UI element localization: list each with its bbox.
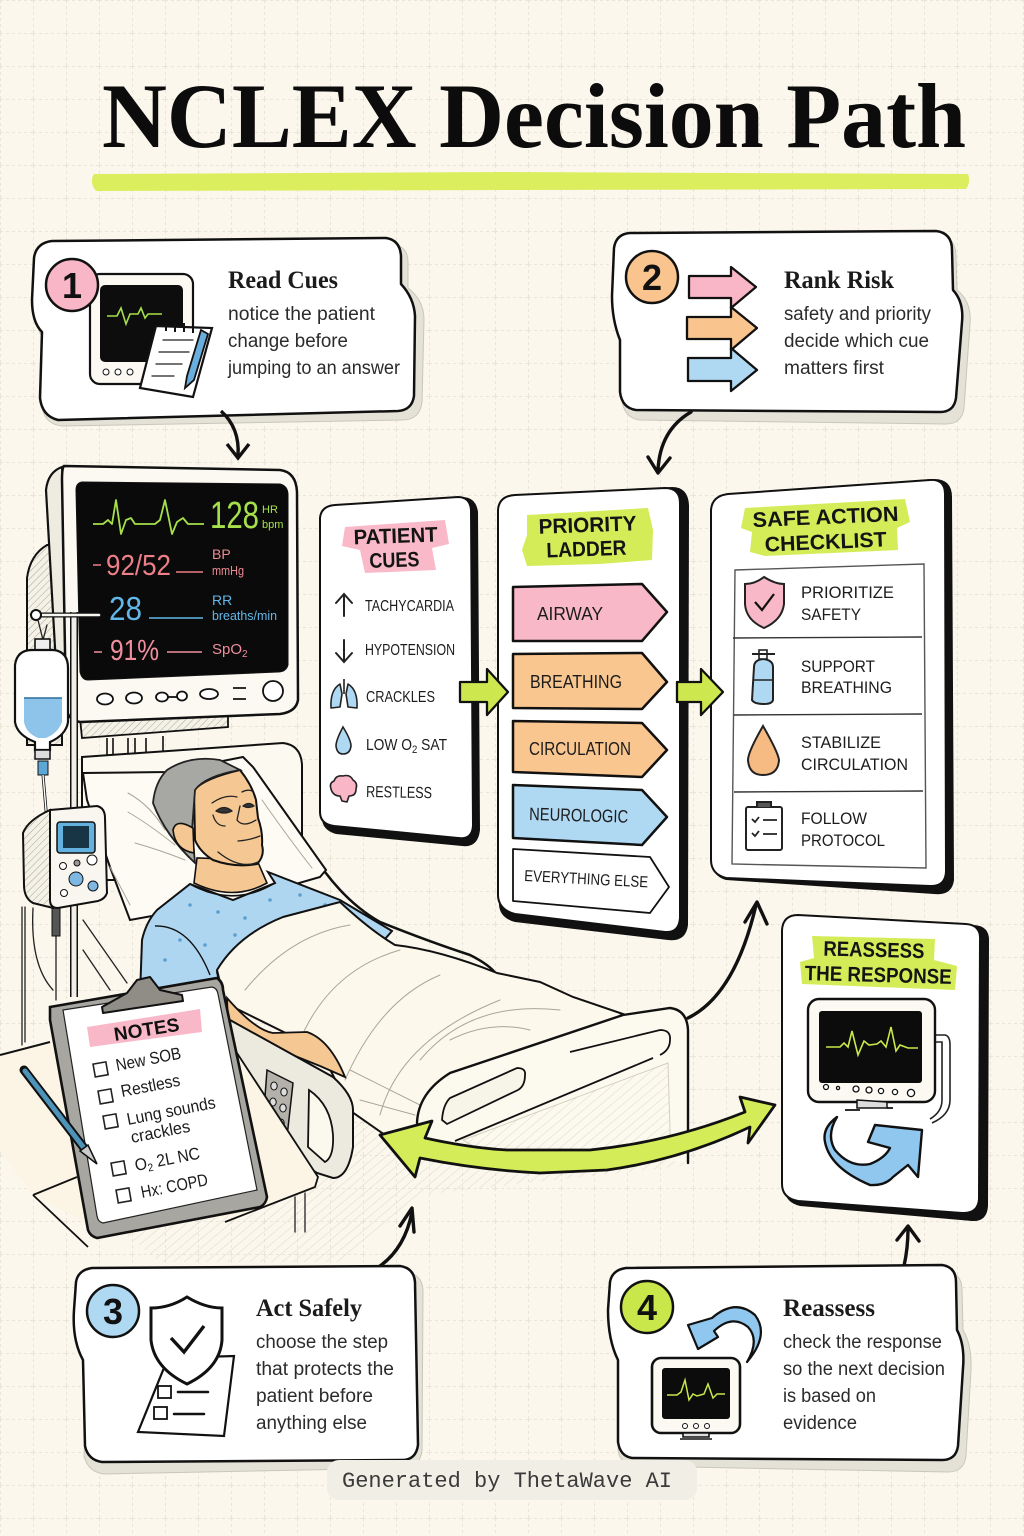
panel: reassess the response [782, 915, 989, 1221]
icon: ranked arrows [687, 267, 757, 391]
item: follow protocol [801, 809, 885, 850]
patient hair [153, 759, 240, 863]
card 2 text: decide which cue [784, 331, 929, 352]
item: stabilize circulation: STABILIZE [801, 733, 881, 752]
monitor rear mount [27, 545, 62, 745]
cue: tachycardia [336, 594, 454, 616]
respiratory rate readout [109, 590, 277, 627]
checklist frame [732, 564, 926, 868]
card 1 text: jumping to an answer [227, 358, 401, 379]
badge 4 [621, 1281, 673, 1333]
footer attribution [327, 1460, 697, 1500]
heading: patient cues: PATIENT [353, 524, 438, 549]
cue: hypotension: HYPOTENSION [365, 642, 455, 659]
card 3 text: that protects the [256, 1359, 394, 1380]
badge 3 [87, 1285, 139, 1337]
card 3 text: choose the step [256, 1332, 388, 1353]
note items: Hx: COPD [139, 1170, 210, 1202]
patient ear [173, 823, 194, 853]
arrow: card 3 to bed [380, 1208, 414, 1266]
card 4 text: evidence [783, 1413, 857, 1434]
arrow: card 1 to monitor [221, 411, 249, 458]
arrow: card 2 to priority ladder [648, 412, 691, 473]
cue: restless with brain icon: RESTLESS [366, 784, 432, 802]
card 1 text [227, 267, 401, 379]
oxygen saturation readout [94, 635, 248, 667]
item: prioritize safety: SAFETY [801, 605, 861, 624]
headboard [82, 743, 302, 880]
patient face [194, 770, 263, 865]
badge 4: 4 [637, 1287, 657, 1328]
monitor bracket [80, 714, 228, 738]
clipboard clip [102, 977, 183, 1013]
note items: Lung sounds [125, 1093, 217, 1129]
rail buttons [263, 1070, 293, 1137]
pump tubing [33, 908, 56, 1000]
cue: low O2 sat with drop icon [336, 727, 447, 756]
blood pressure readout: 92/52 [106, 550, 171, 582]
card 2 text: safety and priority [784, 304, 931, 325]
monitor screen [76, 482, 288, 680]
heading: safe action checklist: CHECKLIST [764, 528, 887, 557]
bed surface hatch [120, 1110, 690, 1262]
icon: oxygen tank [752, 650, 775, 704]
card 3 text: Act Safely [256, 1295, 362, 1322]
cue: low O2 sat with drop icon: 2 [412, 744, 417, 756]
item: support breathing: BREATHING [801, 678, 892, 697]
card 2 text: Rank Risk [784, 267, 894, 294]
icon: shield [745, 577, 784, 628]
heading highlight [522, 508, 653, 566]
badge 1 [46, 259, 98, 311]
heading highlight [342, 520, 449, 573]
badge 1: 1 [62, 265, 82, 306]
respiratory rate readout: 28 [109, 590, 142, 627]
heading: reassess the response [804, 937, 953, 989]
ladder: circulation [513, 721, 667, 777]
IV pole [15, 610, 107, 1000]
footboard plate [463, 1063, 670, 1150]
pillow [83, 757, 326, 920]
icon: reassess monitor [808, 999, 950, 1123]
ladder: airway: AIRWAY [537, 604, 603, 624]
ladder: breathing: BREATHING [530, 672, 622, 692]
cue: low O2 sat with drop icon: LOW O [366, 737, 419, 754]
respiratory rate readout: RR [212, 592, 232, 608]
note items: 2L NC [151, 1144, 202, 1172]
card 3 text: patient before [256, 1386, 373, 1407]
footboard slots [442, 1068, 525, 1124]
panel: safe action checklist [711, 479, 954, 894]
infusion pump [23, 806, 107, 908]
heading: patient cues: CUES [369, 548, 420, 573]
icon: monitor and return arrow [652, 1307, 761, 1439]
cue: crackles with lungs icon: CRACKLES [366, 689, 435, 706]
item: prioritize safety [801, 583, 894, 624]
badge 3: 3 [103, 1291, 123, 1332]
cue: tachycardia: TACHYCARDIA [365, 598, 454, 615]
rail handle [308, 1090, 333, 1162]
card 2: rank risk [612, 231, 970, 424]
oxygen saturation readout: 91% [110, 635, 159, 667]
heading highlight [800, 936, 957, 990]
arrow: footboard to checklist [688, 902, 767, 1018]
heading: priority ladder: PRIORITY [538, 512, 637, 539]
green arrow: ladder to checklist [677, 669, 723, 715]
patient neck [194, 858, 267, 892]
panel: patient cues [320, 497, 480, 846]
ladder: neurologic: NEUROLOGIC [529, 804, 628, 827]
card 3 text [256, 1295, 394, 1434]
icon: shield and checklist [138, 1297, 234, 1436]
bed frame lines [22, 907, 127, 1045]
note items: crackles [129, 1117, 192, 1147]
note items: Restless [119, 1071, 182, 1101]
card 4 text: so the next decision [783, 1359, 945, 1380]
large green double arrow [380, 1097, 775, 1177]
respiratory rate readout: breaths/min [212, 608, 277, 623]
monitor buttons [97, 681, 283, 704]
cue: hypotension [336, 640, 455, 662]
lower mattress edge [325, 872, 497, 975]
heading: reassess the response: REASSESS [823, 938, 925, 963]
ladder: breathing [513, 653, 667, 709]
blood pressure readout: mmHg [212, 563, 244, 578]
item: support breathing: SUPPORT [801, 657, 875, 676]
blood pressure readout: BP [212, 546, 231, 562]
panel: priority ladder [498, 487, 689, 940]
ladder: everything else: EVERYTHING ELSE [524, 868, 649, 891]
notes heading highlight [87, 1009, 202, 1047]
card 4 text [783, 1295, 945, 1434]
notes heading: NOTES [112, 1015, 181, 1046]
vital signs monitor [27, 466, 298, 756]
arrow: card 4 to reassess [897, 1226, 919, 1266]
note items [93, 1044, 217, 1203]
title underline highlight [92, 172, 969, 191]
oxygen saturation readout: SpO [212, 641, 242, 658]
card 1: read cues [32, 238, 424, 426]
gown collar [190, 883, 275, 896]
cue: crackles with lungs icon [331, 679, 435, 708]
patient features [212, 790, 260, 864]
card 3 text: anything else [256, 1413, 367, 1434]
heart rate readout: 128 [210, 495, 259, 537]
IV bag [15, 620, 68, 833]
ECG trace [93, 500, 204, 534]
item: stabilize circulation [801, 733, 908, 774]
icon: reassess blue loop arrow [824, 1117, 922, 1185]
item: follow protocol: PROTOCOL [801, 831, 885, 850]
card 4 text: check the response [783, 1332, 942, 1353]
green arrow: cues to ladder [460, 669, 508, 715]
icon: monitor and notepad [90, 274, 212, 397]
note items: 2 [147, 1162, 155, 1175]
icon: orange drop [748, 726, 779, 775]
note items: New SOB [114, 1044, 183, 1075]
card 1 text: change before [228, 331, 348, 352]
ladder: everything else [513, 849, 669, 913]
heart rate readout: bpm [262, 519, 283, 531]
clipboard with notes [24, 977, 267, 1238]
gown dots [158, 893, 327, 992]
near bed rail [230, 1020, 353, 1178]
heading: patient cues [353, 524, 439, 573]
badge 2: 2 [642, 257, 662, 298]
item: follow protocol: FOLLOW [801, 809, 867, 828]
card 4: reassess [608, 1265, 971, 1472]
ladder: neurologic [513, 785, 667, 845]
pen [24, 1070, 97, 1164]
item: prioritize safety: PRIORITIZE [801, 583, 894, 602]
table [0, 1042, 100, 1200]
footer attribution: Generated by ThetaWave AI [342, 1469, 672, 1494]
ladder: airway [513, 584, 667, 641]
card 1 text: Read Cues [228, 267, 338, 294]
heart rate readout: HR [262, 504, 278, 516]
item: stabilize circulation: CIRCULATION [801, 755, 908, 774]
card 3: act safely [74, 1266, 423, 1474]
card 2 text: matters first [784, 358, 885, 379]
heading: priority ladder [538, 512, 638, 563]
ladder: circulation: CIRCULATION [529, 739, 631, 759]
heading: priority ladder: LADDER [546, 537, 627, 562]
patient gown [140, 872, 392, 1010]
cue: low O2 sat with drop icon: SAT [417, 737, 447, 754]
card 4 text: Reassess [783, 1295, 875, 1322]
bedside scene illustration [0, 743, 690, 1262]
card 2 text [784, 267, 931, 379]
heading: safe action checklist [752, 503, 900, 557]
item: support breathing [801, 657, 892, 697]
footboard [417, 1008, 688, 1163]
oxygen saturation readout: 2 [242, 649, 248, 660]
monitor case [62, 466, 298, 722]
gown sleeve seam [155, 926, 210, 975]
monitor side band [46, 467, 80, 720]
heading: reassess the response: THE RESPONSE [804, 962, 952, 989]
card 4 text: is based on [783, 1386, 876, 1407]
blanket [217, 902, 623, 1135]
blood pressure readout [93, 546, 244, 582]
heading: safe action checklist: SAFE ACTION [752, 503, 899, 532]
heading highlight [741, 499, 910, 556]
card 1 text: notice the patient [228, 304, 376, 325]
patient arm and hand [227, 998, 345, 1077]
icon: protocol clipboard [746, 802, 782, 850]
badge 2 [626, 251, 678, 303]
cue: restless with brain icon [330, 776, 432, 802]
title: NCLEX Decision Path [102, 65, 966, 167]
note items: O [133, 1154, 150, 1175]
